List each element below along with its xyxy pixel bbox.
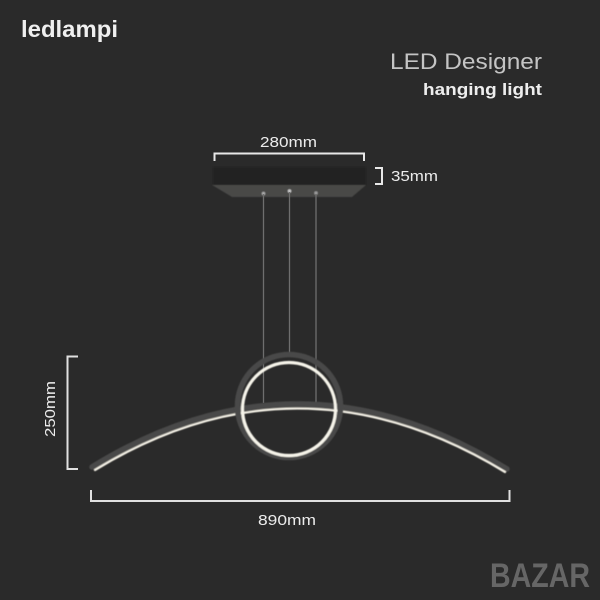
dimension: lamp width 890mm: 890mm [258, 512, 316, 529]
brand logo: ledlampi [21, 16, 118, 42]
dimension: canopy height 35mm [375, 168, 438, 185]
dimension: canopy width 280mm [214, 134, 364, 161]
suspension wires [264, 192, 316, 403]
dimension: lamp height 250mm: 250mm [42, 381, 59, 437]
dimension: lamp height 250mm [42, 356, 78, 469]
dimension: lamp width 890mm [91, 490, 510, 529]
dimension: canopy width 280mm: 280mm [260, 134, 317, 151]
lamp: curved arc [92, 404, 507, 472]
ceiling canopy [212, 167, 366, 197]
dimension: canopy height 35mm: 35mm [391, 168, 438, 185]
lamp: ring [238, 354, 340, 458]
title: LED Designer: LED Designer [390, 49, 542, 74]
subtitle: hanging light: hanging light [423, 80, 542, 99]
